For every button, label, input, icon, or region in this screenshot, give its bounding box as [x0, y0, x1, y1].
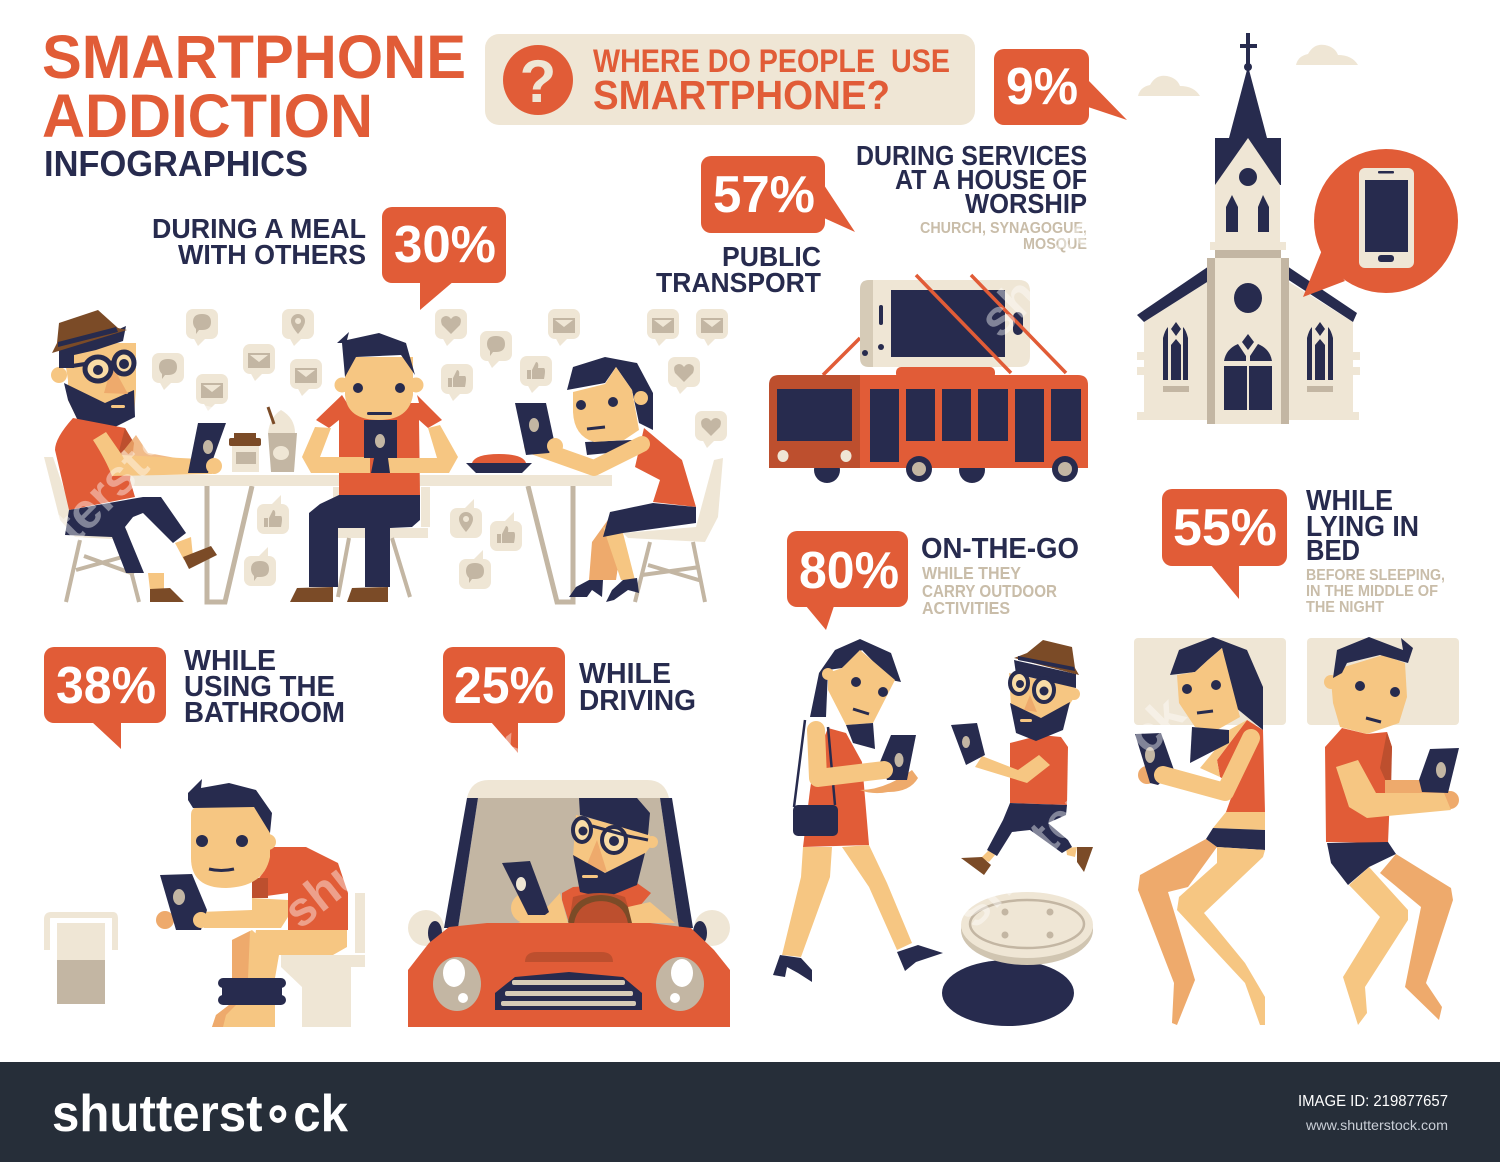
footer bar: shutterst∘ck [52, 1085, 348, 1143]
coffee and drink [229, 407, 297, 472]
worship label: WORSHIP [965, 188, 1087, 219]
bubble: 38%: 38% [56, 657, 156, 715]
jumping man [951, 640, 1093, 875]
bathroom label: BATHROOM [184, 697, 345, 729]
footer bar: IMAGE ID: 219877657 [1298, 1093, 1448, 1110]
lying woman [1134, 637, 1286, 1025]
man center [290, 332, 458, 602]
bubble: 9% [994, 49, 1127, 125]
worship label: MOSQUE [1023, 236, 1087, 253]
bathroom label [184, 645, 345, 729]
public transport label: PUBLIC [722, 241, 821, 272]
question banner [485, 34, 975, 125]
question banner: WHERE DO PEOPLE USE [593, 43, 950, 79]
bathroom scene [156, 779, 365, 1027]
driving label: DRIVING [579, 685, 696, 717]
bathroom label: WHILE [184, 645, 276, 677]
bubble: 80%: 80% [799, 542, 899, 600]
table [130, 475, 612, 602]
speech bubble with phone [1303, 149, 1458, 297]
driving label [579, 658, 696, 717]
title: INFOGRAPHICS [44, 143, 308, 184]
bathroom label: USING THE [184, 671, 335, 703]
lying man [1307, 637, 1459, 1025]
bed label [1306, 485, 1445, 616]
meal label: WITH OTHERS [178, 239, 366, 270]
on-the-go label: ON-THE-GO [921, 533, 1079, 565]
title: ADDICTION [42, 82, 373, 150]
woman [515, 357, 696, 602]
watermarks: shutterst∘ck [968, 95, 1221, 348]
man with hat [51, 310, 226, 602]
driving label: WHILE [579, 658, 671, 690]
bubble: 55% [1162, 489, 1287, 599]
footer bar: www.shutterstock.com [1305, 1117, 1448, 1133]
worship label [856, 140, 1087, 253]
bubble: 55%: 55% [1173, 499, 1277, 557]
watermarks: shutterst∘ck [274, 719, 535, 939]
bed label: LYING IN [1306, 511, 1419, 543]
plate [466, 454, 532, 473]
bed label: BEFORE SLEEPING, [1306, 567, 1445, 584]
worship label: AT A HOUSE OF [895, 164, 1087, 195]
worship label: DURING SERVICES [856, 140, 1087, 171]
on-the-go label: ACTIVITIES [922, 598, 1010, 618]
title: SMARTPHONE [42, 23, 466, 91]
meal label: DURING A MEAL [152, 213, 366, 244]
bubble: 9%: 9% [1006, 58, 1078, 116]
church illustration [1137, 33, 1360, 424]
bed label: THE NIGHT [1306, 599, 1384, 616]
chairs [44, 457, 723, 602]
worship label: CHURCH, SYNAGOGUE, [920, 220, 1087, 237]
bus illustration [769, 275, 1088, 483]
title [42, 23, 466, 184]
bed label: IN THE MIDDLE OF [1306, 583, 1438, 600]
social icons [152, 309, 728, 589]
toilet paper [47, 915, 115, 1004]
watermarks: shutterst∘ck [943, 685, 1196, 938]
public transport label [656, 241, 821, 298]
bubble: 38% [44, 647, 166, 749]
public transport label: TRANSPORT [656, 267, 821, 298]
bubble: 57%: 57% [713, 166, 815, 224]
question banner: ? [520, 48, 556, 115]
bed label: BED [1306, 535, 1360, 567]
on-the-go label: CARRY OUTDOOR [922, 581, 1057, 601]
clouds [1138, 45, 1358, 96]
bubble: 25%: 25% [454, 657, 554, 715]
manhole [942, 892, 1093, 1026]
watermarks [0, 95, 1221, 939]
bubble: 25% [443, 647, 565, 753]
bubble: 57% [701, 156, 855, 233]
question banner: SMARTPHONE? [593, 72, 890, 118]
on-the-go label [921, 533, 1079, 618]
car scene [408, 780, 730, 1027]
bubble: 30%: 30% [394, 216, 496, 274]
meal label [152, 213, 366, 270]
bed label: WHILE [1306, 485, 1393, 517]
bubble: 30% [382, 207, 506, 310]
on-the-go label: WHILE THEY [922, 563, 1021, 583]
bubble: 80% [787, 531, 908, 630]
footer bar [0, 1062, 1500, 1162]
walking woman [773, 639, 943, 982]
meal scene [44, 310, 723, 602]
